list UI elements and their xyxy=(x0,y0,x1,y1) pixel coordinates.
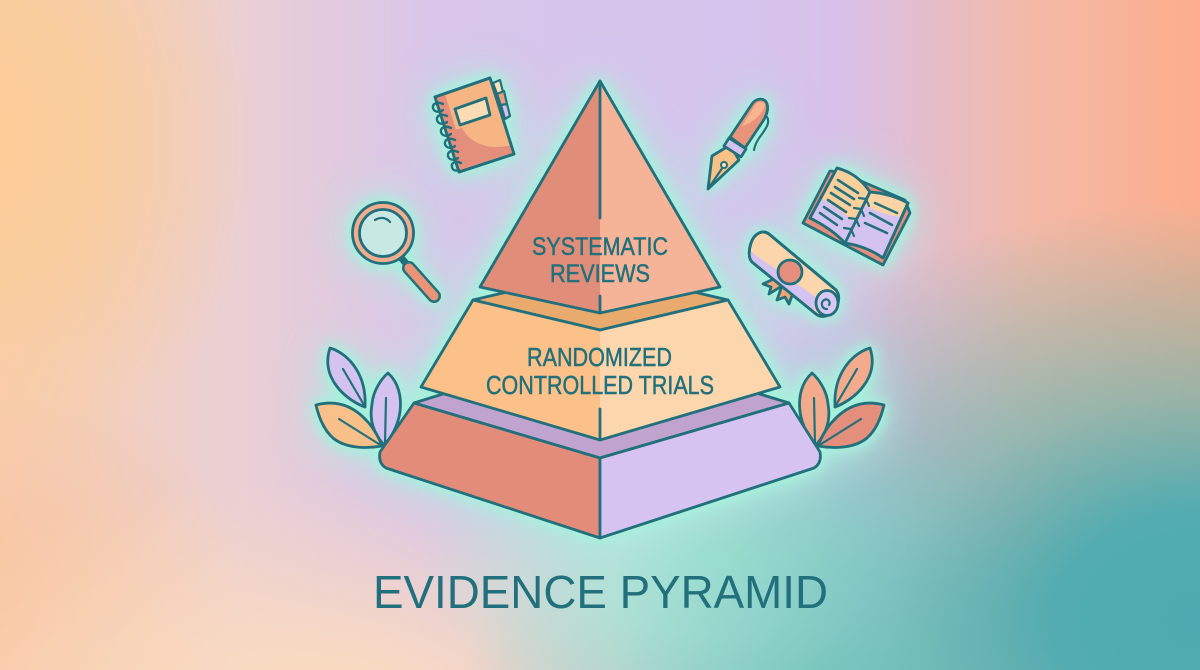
icon: fountain pen xyxy=(708,99,768,189)
label: systematic reviews xyxy=(532,233,668,288)
title: EVIDENCE PYRAMID xyxy=(373,566,828,618)
icon: right leaves xyxy=(800,348,884,447)
label: randomized controlled trials xyxy=(486,342,714,400)
illustration with glow xyxy=(316,78,910,538)
label: systematic reviews: REVIEWS xyxy=(550,260,650,288)
icon: notebook xyxy=(433,78,520,178)
label: systematic reviews: SYSTEMATIC xyxy=(532,233,668,261)
icon: diploma scroll xyxy=(749,232,839,316)
icon: left leaves xyxy=(316,348,400,447)
icon: open book xyxy=(803,168,910,265)
evidence pyramid infographic xyxy=(298,60,930,608)
icon: magnifying glass xyxy=(352,202,434,296)
label: randomized controlled trials: CONTROLLED TRIALS xyxy=(486,370,714,400)
pyramid top tier: systematic reviews xyxy=(480,81,720,313)
pyramid base tier xyxy=(380,345,820,538)
label: randomized controlled trials: RANDOMIZED xyxy=(527,342,672,372)
pyramid middle tier: randomized controlled trials xyxy=(421,270,780,440)
